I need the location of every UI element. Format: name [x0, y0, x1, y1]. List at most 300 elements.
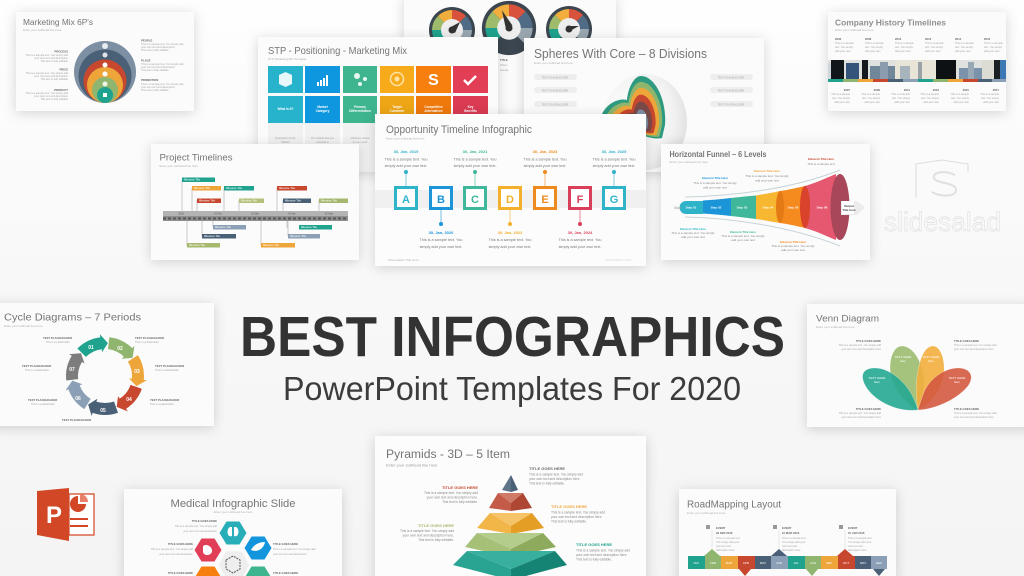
right pills: TEXT PLACEHOLDER	[718, 76, 744, 80]
top year columns: 2008	[865, 37, 872, 41]
tile row: labels: Primary	[354, 105, 366, 109]
timeline band	[375, 190, 646, 208]
left labels: your own text and description	[34, 56, 69, 60]
venn text left: This is a sample text. You simply add	[838, 343, 882, 347]
left labels: This text is fully editable	[40, 97, 69, 101]
heading: Pyramids - 3D – 5 Item	[386, 449, 510, 461]
sample text: This is a sample text. You	[523, 158, 567, 162]
dates: 30, Jan, 2022	[498, 230, 523, 235]
bottom year columns: 2009	[874, 88, 880, 92]
right labels: This text is fully editable	[141, 48, 169, 52]
column descriptions: Market	[282, 140, 290, 144]
milestone bars below: Milestone Title	[215, 226, 232, 229]
bottom year columns	[831, 88, 1000, 104]
medical labels: TITLE GOES HERE	[168, 571, 193, 575]
top year columns: text. You simply	[865, 45, 884, 49]
medical labels: TITLE GOES HERE	[192, 519, 217, 523]
sample text: simply add your own text.	[489, 245, 531, 249]
panel: STP Positioning Marketing Mix: STP Marketing Mix Template	[268, 57, 307, 61]
left pills: TEXT PLACEHOLDER	[542, 102, 568, 106]
cycle labels: TEXT PLACEHOLDER	[150, 398, 179, 402]
icon: PowerPoint logo	[37, 488, 94, 541]
cycle labels: TEXT PLACEHOLDER	[43, 336, 72, 340]
sample text: simply add your own text.	[559, 245, 601, 249]
sample text: simply add your own text.	[524, 164, 566, 168]
roadmap strip: APR	[743, 561, 750, 565]
top year columns: add your own	[955, 49, 971, 53]
funnel output arrow	[841, 201, 865, 215]
event labels: You simply add your	[848, 540, 871, 544]
bottom year columns: This is a sample	[980, 92, 1000, 96]
top year columns: add your own	[925, 49, 941, 53]
footer: Presentation Title Here	[388, 258, 419, 262]
heading: STP - Positioning - Marketing Mix	[268, 45, 408, 57]
left labels: This text is fully editable	[40, 77, 69, 81]
connectors and dots	[404, 170, 616, 226]
step labels: Step 02	[711, 206, 722, 210]
top year columns: add your own	[984, 49, 1000, 53]
tile row: labels: Benefits	[464, 109, 477, 113]
venn text right: This is a sample text. You simply add	[954, 411, 997, 415]
panel: RoadMapping Layout	[679, 489, 896, 576]
left pills	[534, 74, 577, 107]
column descriptions: compete in	[316, 140, 329, 144]
left labels: This is a sample text. You simply add	[25, 53, 69, 57]
left labels	[25, 50, 69, 101]
cycle arrows: 07	[69, 367, 75, 373]
pyramid labels right: your own text and description here.	[529, 477, 580, 481]
milestone bars below: Milestone Title	[204, 235, 221, 238]
venn text left: TITLE GOES HERE	[856, 407, 881, 411]
cycle arrows: 04	[126, 397, 132, 403]
event labels: 23 SEP 2016	[716, 531, 733, 535]
pyramid labels right: This text is fully editable.	[551, 520, 587, 524]
bottom year columns: text. You simply	[981, 96, 1000, 100]
top year columns: 2006	[835, 37, 842, 41]
bottom year columns: This is a sample	[950, 92, 970, 96]
timeline band: 01 Feb	[214, 212, 222, 216]
pyramid labels right: This is a sample text. You simply add	[551, 510, 605, 514]
top year columns: add your own	[835, 49, 851, 53]
gauge caption: sample	[500, 68, 509, 72]
venn text left: This is a sample text. You simply add	[838, 411, 882, 415]
panel: Company History Timelines: Enter your subhead line here	[835, 28, 874, 32]
petal labels: TEXT HERE	[949, 376, 965, 380]
panel: Medical Infographic Slide	[124, 489, 342, 576]
pyramid labels left: This is a sample text. You simply add	[400, 529, 454, 533]
upward markers	[704, 530, 853, 556]
sample text: This is a sample text. You	[453, 158, 497, 162]
panel: Marketing Mix 6P's: Enter your subhead line here	[23, 28, 62, 32]
panel: Horizontal Funnel 6 Levels: Enter your subhead line here	[670, 160, 708, 164]
dates: 30, Jan, 2019	[394, 149, 419, 154]
bottom year columns: text. You simply	[921, 96, 940, 100]
funnel output arrow: Title here	[842, 208, 856, 212]
event labels: You simply add your	[716, 540, 739, 544]
roadmap strip: AUG	[810, 561, 817, 565]
right labels: This text is fully editable	[141, 68, 169, 72]
left labels: your own text and description	[34, 74, 69, 78]
icon: shield with S	[916, 160, 968, 198]
medical labels: TITLE GOES HERE	[273, 571, 298, 575]
petal labels: Item	[874, 380, 880, 384]
icon: PowerPoint logo: P	[46, 502, 62, 529]
petal labels: Item	[928, 359, 934, 363]
sample text: This is a sample text. You	[419, 238, 463, 242]
pyramid labels left: TITLE GOES HERE	[418, 523, 454, 528]
right pills: TEXT PLACEHOLDER	[718, 102, 744, 106]
cycle labels: TEXT PLACEHOLDER	[28, 398, 57, 402]
top year columns: This is a sample	[984, 41, 1003, 45]
panel: Venn Diagram: Enter your subhead line here	[816, 325, 855, 329]
roadmap strip	[688, 556, 887, 569]
pyramid labels left	[400, 485, 478, 542]
element labels: Element Title Here	[702, 176, 728, 180]
funnel segments	[680, 174, 850, 240]
subtitle: PowerPoint Templates For 2020	[283, 370, 741, 407]
element labels: This is a sample text. You simply	[671, 231, 715, 235]
heading: Horizontal Funnel – 6 Levels	[670, 150, 767, 159]
roadmap strip: MAY	[760, 561, 766, 565]
panel: Opportunity Timeline Infographic	[375, 114, 646, 266]
gauge caption	[500, 59, 508, 72]
tile row: labels: Target	[392, 105, 403, 109]
pyramid labels right: This text is fully editable.	[576, 558, 612, 562]
roadmap strip: SEP	[826, 561, 832, 565]
milestone bars above: Milestone Title	[184, 179, 201, 182]
cycle labels: This is a placeholder	[46, 340, 70, 344]
roadmap strip: FEB	[710, 561, 716, 565]
letter tiles: D	[506, 194, 514, 206]
heading: Company History Timelines	[835, 18, 946, 28]
step labels: Step 05	[788, 206, 799, 210]
pyramid labels right: TITLE GOES HERE	[576, 542, 612, 547]
downward markers	[739, 569, 885, 576]
event labels: 10 MAR 2016	[782, 531, 800, 535]
venn petals	[863, 346, 971, 410]
panel: Pyramids 3D 5 Item: Enter your subhead line here	[386, 462, 438, 468]
bottom year columns: This is a sample	[920, 92, 940, 96]
right pills: TEXT PLACEHOLDER	[718, 88, 744, 92]
column descriptions: Attributes unique	[350, 136, 370, 140]
left labels: PROCESS	[54, 50, 68, 54]
letter tiles: C	[471, 194, 479, 206]
venn text left	[838, 339, 882, 419]
event labels: EVENT	[716, 526, 726, 530]
column descriptions: The market that you	[311, 136, 335, 140]
roadmap strip: NOV	[860, 561, 866, 565]
step labels: Step 04	[763, 206, 774, 210]
element labels: Element Title Here	[730, 230, 756, 234]
letter tiles: F	[577, 194, 584, 206]
left labels: This is a sample text. You simply add	[25, 91, 69, 95]
panel: Company History Timelines	[828, 12, 1006, 111]
right labels: This is a sample text. You simply add	[141, 42, 184, 46]
pyramid labels left: This text is fully editable.	[418, 538, 454, 542]
medical labels	[150, 519, 316, 575]
footer	[388, 257, 632, 262]
bottom year columns: text. You simply	[862, 96, 881, 100]
cycle labels: TEXT PLACEHOLDER	[135, 336, 164, 340]
tile row: labels: Differentiation	[349, 109, 371, 113]
tile row: labels: Market	[317, 105, 329, 109]
sample text	[384, 158, 636, 249]
sample text: This is a sample text. You	[558, 238, 602, 242]
cycle arrows: 06	[75, 396, 81, 402]
light columns	[268, 123, 377, 172]
pyramid labels right: your own text and description here.	[551, 515, 602, 519]
bottom year columns: This is a sample	[861, 92, 881, 96]
start label: Start	[674, 206, 681, 210]
element labels: Element Title Here	[754, 169, 780, 173]
bottom year columns: 2013	[933, 88, 939, 92]
cycle labels: This is a placeholder	[155, 368, 179, 372]
element labels: Element Title Here	[780, 240, 806, 244]
icon: centre gauge	[482, 1, 536, 55]
3D pyramid	[453, 475, 567, 576]
roadmap strip: MAR	[726, 561, 733, 565]
timeline band: 01 Mar	[251, 212, 259, 216]
pyramid labels left: your own text and description here.	[427, 496, 478, 500]
milestone bars below: Milestone Title	[189, 244, 206, 247]
element labels: This is a sample text. You simply	[693, 181, 737, 185]
gauge caption: This is	[500, 63, 508, 67]
pyramid labels right: TITLE GOES HERE	[529, 466, 565, 471]
top year columns: This is a sample	[865, 41, 884, 45]
element labels	[671, 157, 835, 252]
left labels: your own text and description	[34, 94, 69, 98]
heading: Marketing Mix 6P's	[23, 18, 93, 27]
bottom year columns: add your own	[953, 100, 970, 104]
medical labels: This is a sample text. You simply add	[273, 547, 316, 551]
venn text right: your own text and description here	[954, 415, 994, 419]
heading: RoadMapping Layout	[687, 500, 781, 510]
event labels	[706, 525, 872, 552]
venn text left: TITLE GOES HERE	[856, 339, 881, 343]
icon: right gauge	[546, 6, 592, 38]
roadmap strip: JAN	[693, 561, 699, 565]
milestone bars above: Milestone Title	[199, 200, 216, 203]
column descriptions: Description of the	[275, 136, 296, 140]
sample text: This is a sample text. You	[384, 158, 428, 162]
milestone bars above: Milestone Title	[241, 200, 258, 203]
panel: Marketing Mix 6P's	[16, 12, 194, 111]
bottom year columns: add your own	[834, 100, 851, 104]
panel: Cycle Diagrams 7 Periods	[0, 303, 214, 426]
medical labels: your own text and description	[183, 529, 218, 533]
timeline band: 01 Apr	[288, 212, 296, 216]
dates: 30, Jan, 2025	[602, 149, 627, 154]
letter tiles: A	[402, 194, 410, 206]
left labels: This text is fully editable	[40, 59, 69, 63]
cycle labels: This is a placeholder	[135, 340, 159, 344]
letter tiles: G	[610, 194, 618, 206]
petal labels: TEXT HERE	[869, 376, 885, 380]
right labels: PROMOTION	[141, 78, 158, 82]
tile row: labels: Key	[468, 105, 474, 109]
left pills: TEXT PLACEHOLDER	[542, 88, 568, 92]
right labels: This is a sample text. You simply add	[141, 62, 184, 66]
top year columns: 2014	[955, 37, 962, 41]
tile row: labels: What Is It?	[277, 107, 294, 111]
left labels: PRICE	[59, 68, 68, 72]
petal labels: Item	[954, 380, 960, 384]
top year columns: text. You simply	[895, 45, 914, 49]
roadmap strip: DEC	[876, 561, 883, 565]
bottom year columns: 2017	[993, 88, 999, 92]
cycle arrows	[61, 333, 147, 418]
pyramid labels left: your own text and description here.	[403, 534, 454, 538]
dates	[394, 149, 627, 235]
element labels: This is a sample text. You simply	[721, 234, 765, 238]
element labels: Element Title Here	[808, 157, 834, 161]
right pills	[710, 74, 753, 107]
event labels: EVENT	[782, 526, 792, 530]
bottom year columns: add your own	[894, 100, 911, 104]
sample text: simply add your own text.	[593, 164, 635, 168]
roadmap strip: JUN	[776, 561, 782, 565]
event labels: EVENT	[848, 526, 858, 530]
right labels: your own text and description	[141, 65, 175, 69]
petal labels: TEXT HERE	[923, 355, 939, 359]
tile row: labels: Category	[316, 109, 330, 113]
right labels: PEOPLE	[141, 38, 152, 42]
cycle arrows: 05	[100, 408, 106, 414]
panel: Opportunity Timeline Infographic: Enter your subhead line here	[386, 136, 425, 140]
left labels: This is a sample text. You simply add	[25, 71, 69, 75]
pyramid labels right: This is a sample text. You simply add	[529, 472, 583, 476]
funnel output arrow: Output	[844, 204, 854, 208]
right labels: This is a sample text. You simply add	[141, 82, 184, 86]
top year columns: text. You simply	[835, 45, 854, 49]
top year columns: 2016	[984, 37, 991, 41]
pyramid labels right: This text is fully editable.	[529, 482, 565, 486]
cycle labels: TEXT PLACEHOLDER	[155, 364, 184, 368]
event labels: 15 JAN 2016	[848, 531, 865, 535]
sample text: simply add your own text.	[385, 164, 427, 168]
tile row: labels: Competitive	[424, 105, 443, 109]
top year columns: This is a sample	[925, 41, 944, 45]
top year columns: This is a sample	[955, 41, 974, 45]
event labels: description here	[716, 548, 735, 552]
panel: STP Positioning Marketing Mix	[258, 37, 498, 172]
letter tiles	[396, 188, 624, 208]
timeline band: 2018	[178, 212, 184, 216]
logo: slidesalad	[884, 160, 1001, 237]
main title: BEST INFOGRAPHICS	[240, 305, 785, 369]
right labels: your own text and description	[141, 85, 175, 89]
right labels	[141, 38, 184, 92]
petal labels	[869, 355, 965, 384]
medical labels: TITLE GOES HERE	[168, 542, 193, 546]
cycle labels: TEXT PLACEHOLDER	[22, 364, 51, 368]
milestone bars below: Milestone Title	[263, 244, 280, 247]
step labels	[686, 206, 828, 210]
sphere with core	[602, 74, 687, 170]
cycle labels: This is a placeholder	[25, 368, 49, 372]
panel: Spheres With Core	[524, 38, 764, 172]
pyramid labels right	[529, 466, 630, 562]
bottom year columns: text. You simply	[951, 96, 970, 100]
cycle labels	[22, 336, 184, 422]
nested circles chart	[74, 41, 136, 103]
panel: Venn Diagram	[807, 304, 1024, 427]
sample text: simply add your own text.	[420, 245, 462, 249]
roadmap strip: OCT	[843, 561, 849, 565]
milestone bars below: Milestone Title	[290, 235, 307, 238]
event labels: own text and	[716, 544, 731, 548]
petal labels: TEXT HERE	[895, 355, 911, 359]
heading: Venn Diagram	[816, 314, 879, 324]
cycle labels: TEXT PLACEHOLDER	[62, 418, 91, 422]
venn text left: your own text and description here	[841, 415, 882, 419]
roadmap strip: JUL	[793, 561, 799, 565]
top year columns: text. You simply	[955, 45, 974, 49]
pyramid labels right: This is a sample text. You simply add	[576, 548, 630, 552]
event labels: own text and	[848, 544, 863, 548]
pyramid labels left: TITLE GOES HERE	[442, 485, 478, 490]
tile row: icons: S	[428, 72, 439, 89]
panel: Spheres With Core: Enter your subhead line here	[534, 61, 573, 65]
pyramid labels left: This is a sample text. You simply add	[424, 491, 478, 495]
venn text left: your own text and description here	[841, 347, 882, 351]
icon: left gauge	[429, 7, 475, 37]
sample text: This is a sample text. You	[488, 238, 532, 242]
cycle labels: This is a placeholder	[150, 402, 174, 406]
medical labels: TITLE GOES HERE	[273, 542, 298, 546]
panel: Medical Infographic Slide: Enter your subhead line here	[214, 510, 253, 514]
panel: Project Timelines: Enter your subhead line here	[160, 164, 198, 168]
bottom year columns: add your own	[923, 100, 940, 104]
step labels: Step 06	[817, 206, 828, 210]
element labels: Element Title Here	[680, 227, 706, 231]
element labels: add your own text	[781, 248, 805, 252]
bottom year columns: 2011	[904, 88, 910, 92]
top year columns	[835, 37, 1003, 53]
letter tiles: E	[541, 194, 549, 206]
vertical stems	[182, 180, 319, 246]
panel: Pyramids 3D 5 Item	[375, 436, 646, 576]
event labels: You simply add your	[782, 540, 805, 544]
tile row: labels: Alternatives	[424, 109, 443, 113]
element labels: This is a sample text. You simply	[771, 244, 815, 248]
milestone bars above: Milestone Title	[321, 200, 338, 203]
step labels: Step 03	[737, 206, 748, 210]
element labels: This is a sample text	[807, 162, 835, 166]
dates: 30, Jan, 2023	[533, 149, 558, 154]
cycle arrows: 01	[88, 345, 94, 351]
medical labels: This is a sample text. You simply add	[150, 547, 194, 551]
milestone bars above: Milestone Title	[226, 187, 243, 190]
colour band	[828, 79, 1006, 82]
element labels: add your own text	[681, 235, 705, 239]
top year columns: text. You simply	[925, 45, 944, 49]
event labels: description here	[782, 548, 801, 552]
wordmark: slidesalad	[884, 207, 1001, 237]
column descriptions: to your good	[353, 140, 368, 144]
pyramid labels right: TITLE GOES HERE	[551, 504, 587, 509]
bottom year columns: This is a sample	[891, 92, 911, 96]
timeline band: 01 May	[325, 212, 334, 216]
city photo strip	[828, 60, 1006, 79]
pyramid labels right: your own text and description here.	[576, 553, 627, 557]
medical labels: This is a sample text. You simply add	[174, 524, 218, 528]
left pills: TEXT PLACEHOLDER	[542, 76, 568, 80]
element labels: add your own text	[703, 186, 727, 190]
milestone bars above	[182, 178, 348, 203]
element labels: add your own text	[755, 178, 779, 182]
column descriptions	[275, 136, 370, 144]
